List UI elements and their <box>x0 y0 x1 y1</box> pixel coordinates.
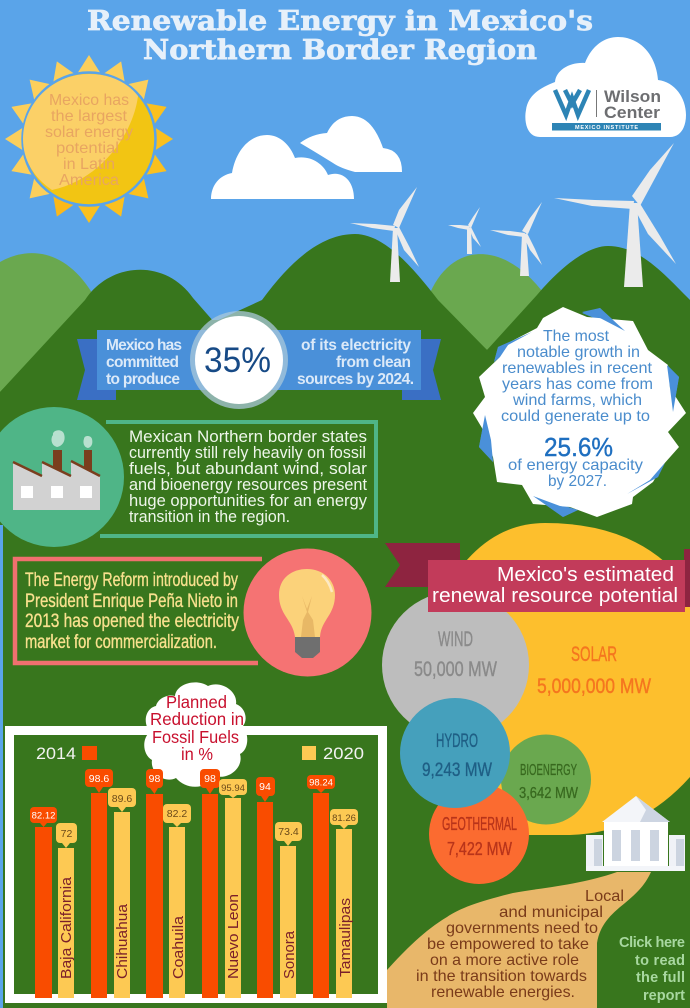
heading ribbon <box>428 560 685 612</box>
state labels: Baja California <box>59 876 75 979</box>
value tags 2020 <box>56 779 358 848</box>
icon: light bulb <box>279 569 335 658</box>
banner right text <box>297 337 414 388</box>
reform text: President Enrique Peña Nieto in <box>25 591 238 612</box>
chart title: Planned <box>166 692 227 712</box>
sun text: America <box>59 172 119 189</box>
panel: energy reform <box>15 548 372 676</box>
badge circle <box>195 316 283 404</box>
bar chart: planned reduction in fossil fuels <box>10 682 382 998</box>
state labels <box>59 876 354 979</box>
local governments text: governments need to <box>446 920 598 937</box>
sun text: solar energy <box>45 124 133 141</box>
ribbon tail left <box>385 543 460 587</box>
badge text: by 2027. <box>548 473 607 490</box>
badge white shape <box>473 307 686 517</box>
title <box>87 6 593 66</box>
bubble: geothermal <box>429 784 529 884</box>
ground background <box>0 320 690 1008</box>
logo divider <box>596 90 597 117</box>
call to action <box>619 935 685 1004</box>
badge text: could generate up to <box>501 408 650 425</box>
value tags 2014: 98 <box>204 773 216 785</box>
sun text: Mexico has <box>49 92 129 109</box>
local governments text: and municipal <box>499 904 603 921</box>
reform text: 2013 has opened the electricity <box>25 611 239 632</box>
local governments text: renewable energies. <box>431 984 575 1001</box>
clouds <box>205 116 402 206</box>
solar label: 5,000,000 MW <box>537 675 651 698</box>
legend 2014: 2014 <box>36 745 76 763</box>
wind label <box>414 628 497 681</box>
chart title cloud <box>144 682 247 787</box>
sun disc <box>22 72 156 206</box>
badge text: of energy capacity <box>508 457 643 474</box>
sand road <box>387 872 651 1008</box>
logo cloud <box>525 37 686 137</box>
logo mark <box>555 90 589 115</box>
logo bar <box>552 123 661 130</box>
badge text: wind farms, which <box>512 392 642 409</box>
state labels: Chihuahua <box>115 903 131 979</box>
sun rays <box>5 55 173 223</box>
badge blue spikes front <box>479 308 679 517</box>
panel text: transition in the region. <box>129 508 290 526</box>
value tags 2014: 82.12 <box>32 810 55 822</box>
bioenergy label <box>519 762 579 802</box>
value tags 2014: 98.6 <box>89 773 109 785</box>
hydro label <box>422 731 492 781</box>
turbine 3 <box>490 202 542 276</box>
turbine 4 <box>554 143 676 287</box>
bubble: hydro <box>400 698 510 808</box>
icon: factory <box>13 430 100 510</box>
value tags 2014 <box>30 769 335 827</box>
banner right text: sources by 2024. <box>297 371 414 388</box>
badge blue spikes <box>479 308 679 517</box>
value tags 2020: 95.94 <box>221 783 245 794</box>
badge text: notable growth in <box>517 344 640 361</box>
badge figure: 25.6% <box>544 432 613 462</box>
state labels: Coahuila <box>171 915 187 979</box>
logo bar label: MEXICO INSTITUTE <box>575 125 638 131</box>
banner left text: to produce <box>106 371 180 388</box>
sun text: the largest <box>51 108 128 125</box>
hydro label: HYDRO <box>436 731 478 752</box>
local governments text: in the transition towards <box>416 968 587 985</box>
value tags 2014: 98.24 <box>309 778 333 788</box>
chart frame <box>10 730 382 998</box>
value tags 2020: 81.26 <box>332 813 356 824</box>
logo name: Wilson <box>604 87 661 106</box>
legend 2014 <box>36 745 97 763</box>
panel text: Mexican Northern border states <box>129 428 367 446</box>
halo <box>190 311 288 409</box>
badge text <box>501 328 653 490</box>
value tags 2014: 94 <box>259 781 271 793</box>
sun text: potential <box>56 140 119 157</box>
badge text: renewables in recent <box>502 360 653 377</box>
hydro label: 9,243 MW <box>422 760 492 781</box>
commitment banner <box>77 311 441 409</box>
wind label: WIND <box>438 628 473 651</box>
turbine 1 <box>350 187 419 282</box>
logo name: Center <box>604 103 660 122</box>
call to action: to read <box>635 953 685 969</box>
panel text: huge opportunities for an energy <box>129 492 368 510</box>
reform text: The Energy Reform introduced by <box>25 570 238 591</box>
chart title: in % <box>181 744 213 764</box>
panel text: currently still rely heavily on fossil <box>129 444 366 462</box>
local governments text: on a more active role <box>430 952 579 969</box>
bulb circle <box>244 548 372 676</box>
bubble: wind <box>382 592 529 738</box>
panel frame <box>100 422 376 536</box>
solar label: SOLAR <box>571 643 617 666</box>
sun highlight <box>23 74 138 190</box>
state labels: Tamaulipas <box>338 898 354 977</box>
banner right text: of its electricity <box>301 337 411 354</box>
reform text: market for commercialization. <box>25 632 217 653</box>
state labels: Nuevo Leon <box>226 894 242 979</box>
ribbon tails <box>77 339 441 400</box>
resource potential bubble chart <box>382 523 690 884</box>
chart title: Fossil Fuels <box>152 727 239 747</box>
panel text: fuels, but abundant wind, solar <box>129 460 368 478</box>
badge text: The most <box>543 328 610 345</box>
sun text: in Latin <box>63 156 115 173</box>
title: Renewable Energy in Mexico's <box>87 6 593 37</box>
panel text: and bioenergy resources present <box>129 476 367 494</box>
bars 2014 <box>35 793 329 998</box>
bubble: bioenergy <box>501 734 591 824</box>
local governments text: Local <box>585 888 624 905</box>
sun text <box>45 92 133 189</box>
geothermal label: 7,422 MW <box>447 839 512 859</box>
reform text <box>25 570 239 653</box>
value tags 2020: 72 <box>61 828 72 840</box>
local governments text: be empowered to take <box>427 936 589 953</box>
local governments text <box>416 888 624 1001</box>
ribbon tail right <box>684 549 690 607</box>
percentage: 35% <box>204 341 271 380</box>
heading text: Mexico's estimated <box>497 564 674 586</box>
banner left text: committed <box>106 354 179 371</box>
badge text: years has come from <box>502 376 653 393</box>
legend 2020: 2020 <box>323 745 364 763</box>
value tags 2014: 98 <box>149 773 160 785</box>
wind label: 50,000 MW <box>414 658 497 681</box>
call to action: the full <box>636 970 685 986</box>
call to action: report <box>643 988 685 1004</box>
sky background <box>0 0 690 340</box>
bioenergy label: BIOENERGY <box>520 762 577 779</box>
wind turbines <box>350 143 676 287</box>
left edge strip <box>0 525 3 1008</box>
geothermal label <box>442 814 517 859</box>
call to action: Click here <box>619 935 685 951</box>
icon: government building <box>586 796 685 871</box>
banner right text: from clean <box>336 354 411 371</box>
icon: sun with callout <box>5 55 173 223</box>
turbine 2 <box>448 207 481 254</box>
bioenergy label: 3,642 MW <box>519 785 579 802</box>
chart title <box>150 692 244 764</box>
banner left text <box>106 337 182 388</box>
chart title: Reduction in <box>150 709 244 729</box>
panel: fossil fuels <box>0 407 376 547</box>
heading text <box>432 564 678 607</box>
ribbon body <box>97 330 421 390</box>
geothermal label: GEOTHERMAL <box>442 814 517 834</box>
heading text: renewal resource potential <box>432 585 678 607</box>
banner left text: Mexico has <box>106 337 182 354</box>
reform frame <box>15 559 262 663</box>
logo name <box>604 87 661 122</box>
bars 2020 <box>58 798 352 998</box>
title: Northern Border Region <box>143 35 537 66</box>
value tags 2020: 89.6 <box>112 793 132 805</box>
bubble: solar <box>440 523 690 835</box>
value tags 2020: 82.2 <box>167 808 187 820</box>
value tags 2020: 73.4 <box>278 826 299 838</box>
solar label <box>537 643 651 698</box>
legend 2020 <box>302 745 364 763</box>
factory circle <box>0 407 124 547</box>
panel text <box>129 428 368 526</box>
wind farm badge <box>473 307 686 517</box>
state labels: Sonora <box>282 930 298 979</box>
hills <box>0 234 690 400</box>
